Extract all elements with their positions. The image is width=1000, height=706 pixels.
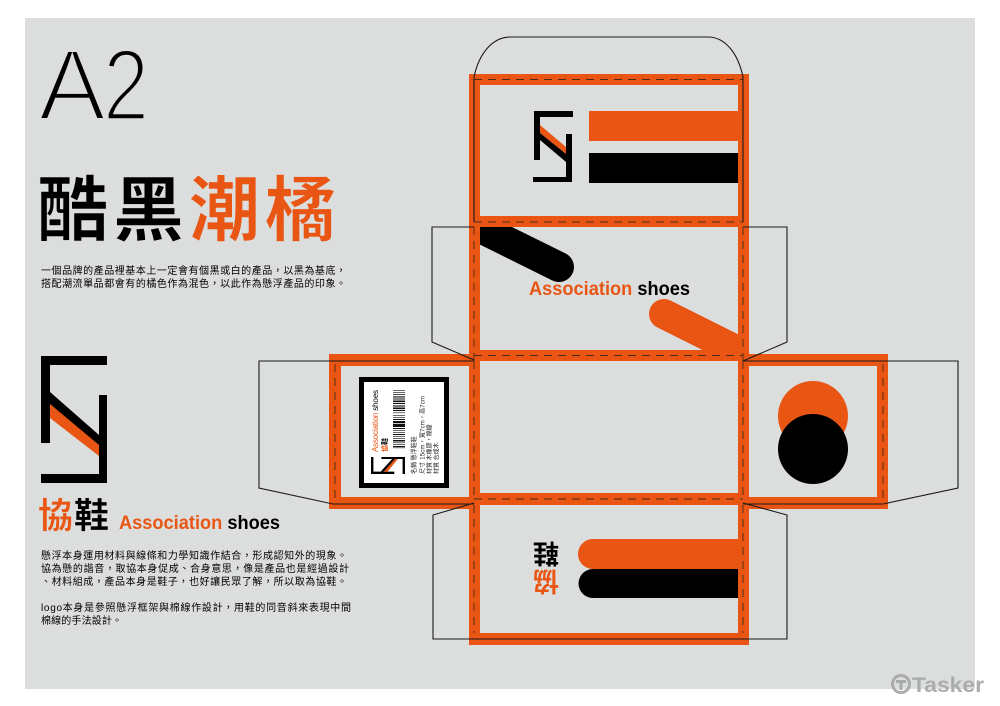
text block: name and logo explanation: 協為懸的諧音，取協本身促成、合身意思，像是產品也是經過設計 bbox=[41, 562, 349, 575]
panel: bottom face bars and inverted brand name: 協 bbox=[533, 566, 559, 596]
product label: 協鞋 bbox=[380, 438, 389, 452]
panel: right side frame bbox=[749, 354, 888, 509]
text block: concept description bbox=[41, 264, 346, 290]
text block: name and logo explanation: logo本身是參照懸浮框架與棉線作設計，用鞋的同音斜來表現中間 bbox=[41, 601, 351, 614]
box artwork: orange frames bbox=[469, 74, 749, 645]
heading: A2: 2 bbox=[103, 28, 149, 142]
product label bbox=[362, 380, 446, 486]
logo: large mark bbox=[41, 356, 107, 483]
text block: name and logo explanation: 、材料組成，產品本身是鞋子，也好讓民眾了解，所以取為協鞋。 bbox=[41, 575, 347, 588]
heading: A2 bbox=[38, 28, 149, 142]
product label: 材質 合成木 bbox=[432, 442, 440, 474]
text block: name and logo explanation: 懸浮本身運用材料與線條和力學知識作結合，形成認知外的現象。 bbox=[41, 549, 347, 562]
panel: top face bars and logo bbox=[533, 111, 741, 183]
brand name: 協鞋 Association shoes: Association shoes bbox=[119, 513, 280, 534]
product label: Association shoes bbox=[371, 390, 380, 452]
title: 酷黑潮橘: 酷黑潮橘 bbox=[37, 172, 341, 251]
product label: 尺寸 15cm，寬7cm，高7cm bbox=[418, 396, 426, 474]
brand name: 協鞋 Association shoes bbox=[38, 497, 280, 536]
panel: front face diagonal pills and wordmark bbox=[480, 227, 738, 350]
panel: circles on right side bbox=[778, 381, 848, 484]
panel: bottom face bars and inverted brand name: 鞋 bbox=[533, 538, 559, 568]
box die line: outlines of flaps bbox=[259, 37, 958, 639]
heading: A2: A bbox=[38, 30, 106, 142]
product label: 名稱 懸浮鞋鞋 bbox=[410, 436, 418, 474]
panel: left side frame bbox=[329, 354, 469, 509]
watermark: Tasker: Tasker bbox=[912, 674, 984, 697]
text block: concept description: 搭配潮流單品都會有的橘色作為混色，以此作為懸浮產品的印象。 bbox=[41, 277, 346, 290]
text block: name and logo explanation bbox=[41, 549, 351, 627]
panel: bottom face bars and inverted brand name bbox=[533, 538, 738, 598]
panel: front face diagonal pills and wordmark: Association shoes bbox=[529, 279, 690, 300]
text block: concept description: 一個品牌的產品裡基本上一定會有個黑或白的產品，以黑為基底， bbox=[41, 264, 346, 277]
product label: 材質 木橡膠，棉線 bbox=[426, 424, 434, 474]
text block: name and logo explanation: 棉線的手法設計。 bbox=[41, 614, 122, 627]
brand name: 協鞋 Association shoes: 協鞋 bbox=[38, 497, 110, 536]
box die line: dashed fold lines bbox=[335, 80, 883, 633]
